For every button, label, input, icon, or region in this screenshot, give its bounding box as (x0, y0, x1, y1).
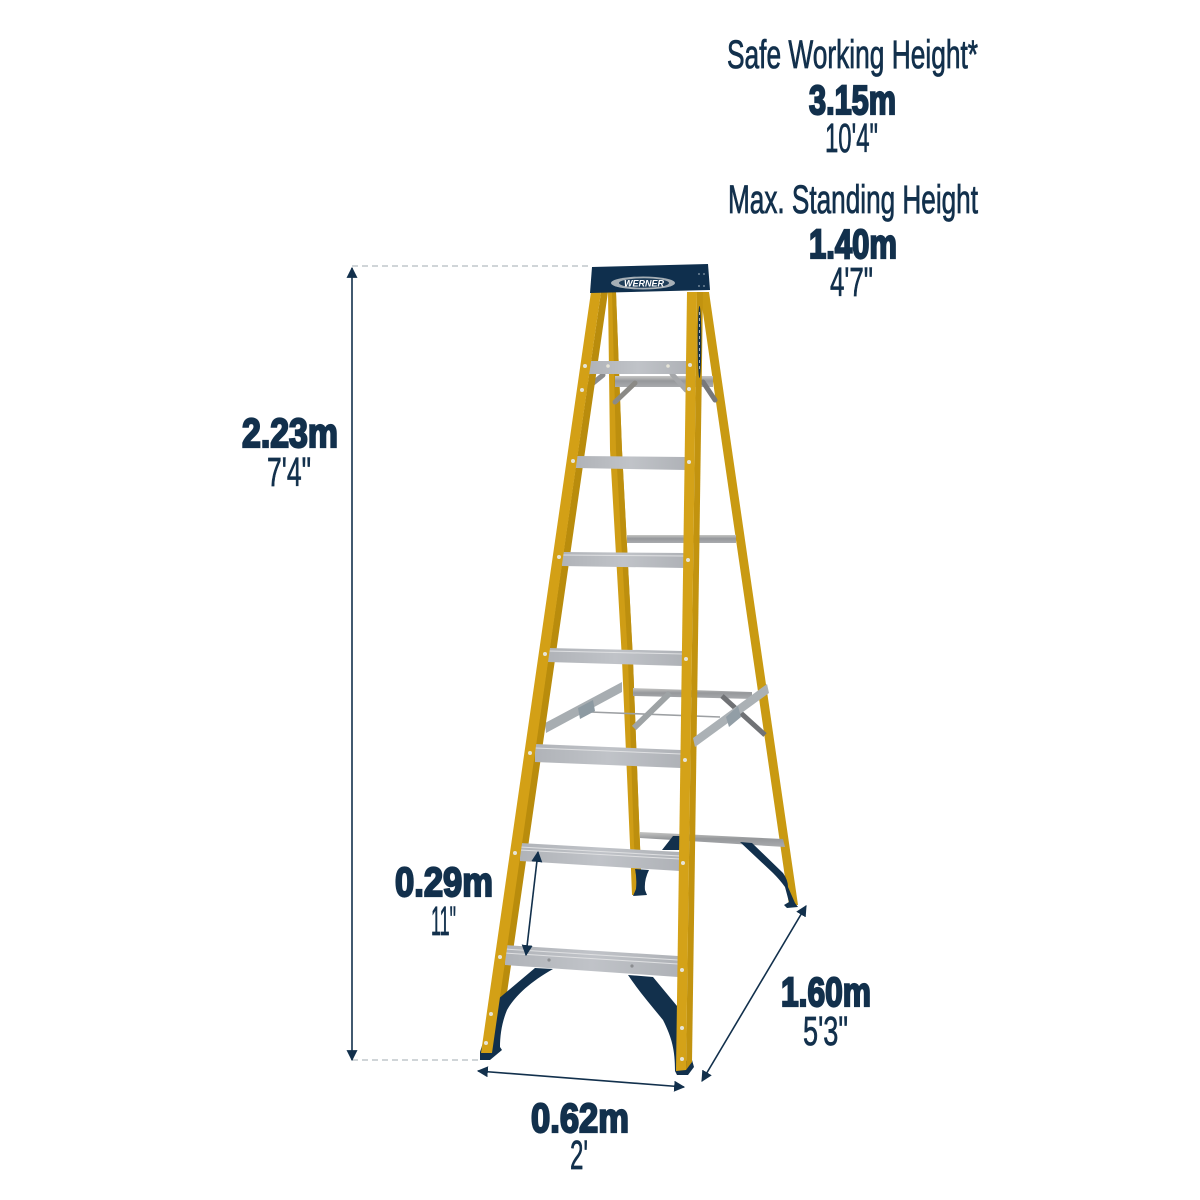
top rear braces (587, 374, 715, 402)
width label (531, 1095, 629, 1178)
depth label (781, 969, 871, 1054)
rear left leg (608, 292, 642, 895)
depth label: 5'3" (803, 1008, 848, 1054)
rear rungs (615, 376, 785, 847)
left front foot bracket (480, 968, 553, 1060)
rail sticker (698, 306, 701, 378)
safe working height (727, 33, 978, 161)
right front foot bracket (628, 975, 694, 1075)
rivets (484, 363, 692, 1061)
front right spreader arm (693, 684, 769, 747)
width label: 0.62m (531, 1095, 629, 1141)
safe working height: Safe Working Height* (727, 33, 978, 77)
left front rail (481, 292, 601, 1053)
depth label: 1.60m (781, 969, 871, 1015)
step spacing label: 11" (431, 898, 456, 944)
Werner logo: WERNER (624, 278, 664, 288)
ladder illustration (480, 264, 798, 1075)
max standing height: Max. Standing Height (728, 178, 978, 222)
ladder top cap (590, 264, 710, 293)
step spacing arrow (526, 852, 538, 955)
spreader braces (545, 682, 765, 735)
rear foot brackets (633, 836, 798, 908)
dashed guide lines (352, 266, 590, 1060)
height dimension arrow (351, 268, 353, 1060)
overall height label: 7'4" (267, 449, 311, 495)
max standing height: 1.40m (809, 221, 897, 267)
rear right leg (700, 292, 798, 905)
cap rivets (698, 273, 705, 287)
max standing height: 4'7" (830, 259, 873, 305)
Werner logo (611, 276, 675, 290)
right front rail (676, 292, 703, 1071)
steps (505, 361, 687, 977)
left rail inner face (499, 292, 608, 1000)
step spacing label: 0.29m (395, 859, 493, 905)
overall height label (242, 410, 338, 495)
depth dimension arrow (702, 906, 806, 1081)
max standing height (728, 178, 978, 305)
overall height label: 2.23m (242, 410, 338, 456)
safe working height: 10'4" (825, 115, 878, 161)
width label: 2' (570, 1132, 588, 1178)
width dimension arrow (478, 1071, 684, 1087)
step spacing label (395, 859, 493, 944)
safe working height: 3.15m (809, 77, 896, 123)
